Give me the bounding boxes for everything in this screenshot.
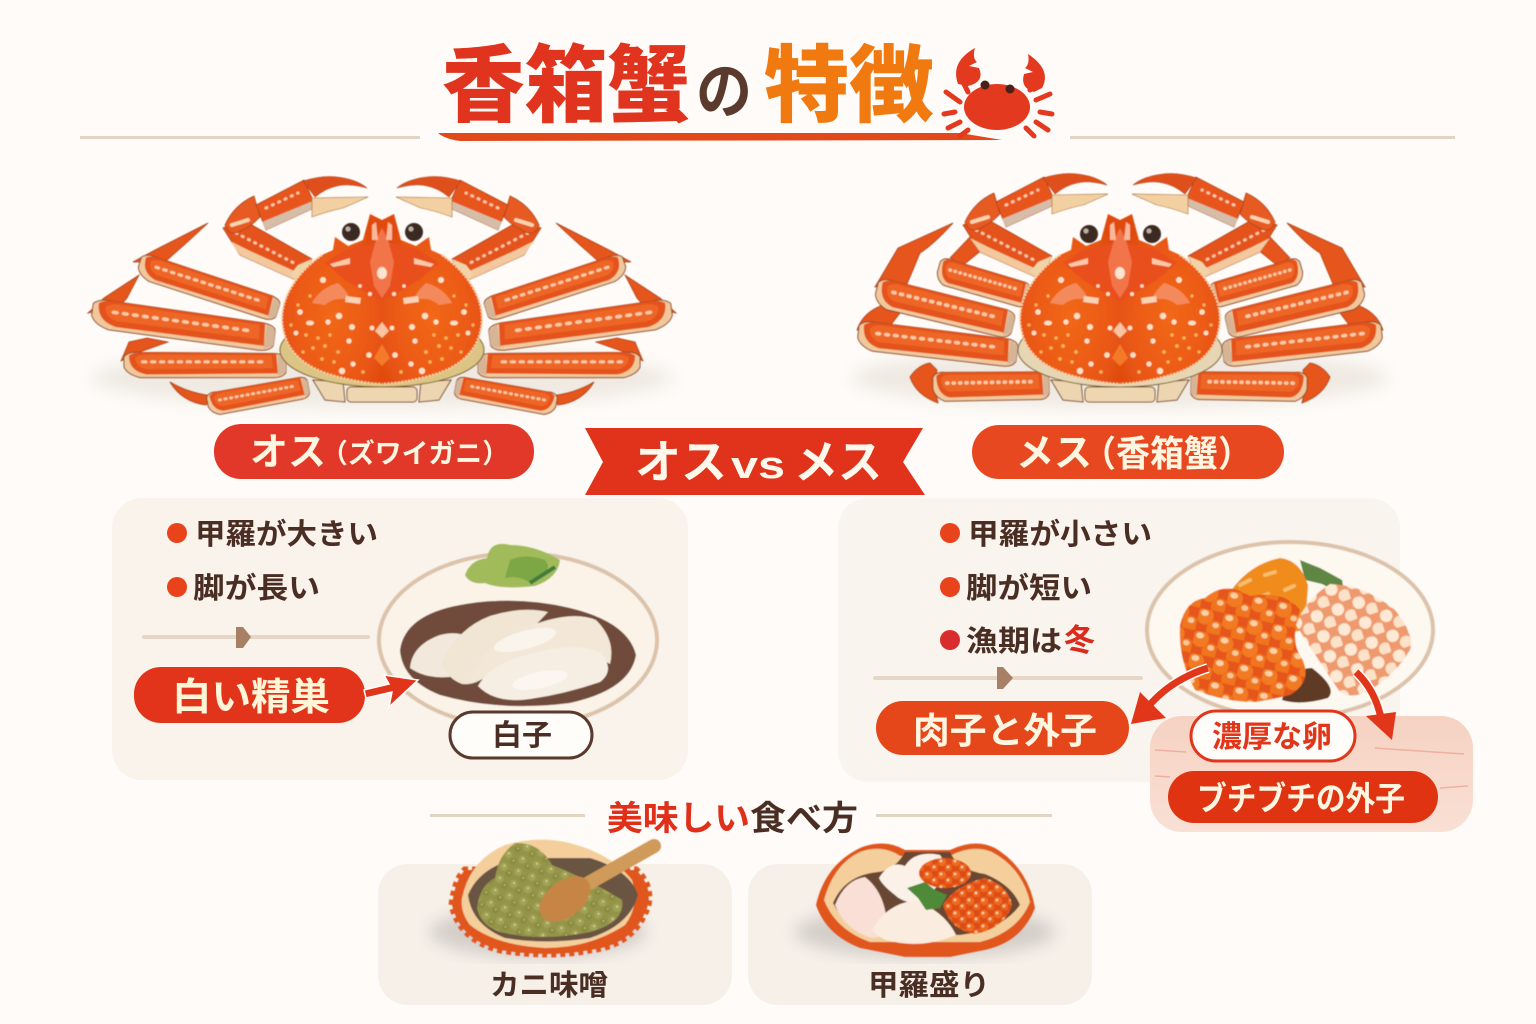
arrow: to outer roe label	[1356, 672, 1396, 740]
banner: male vs female: vs	[731, 445, 785, 487]
title text	[442, 19, 934, 140]
title text: の	[696, 41, 752, 131]
panel: female	[838, 498, 1473, 832]
card: crab miso	[378, 840, 732, 1005]
label: shirako: 白子	[492, 712, 552, 754]
label: meat roe and outer roe	[876, 701, 1129, 755]
bullet list: 甲羅が小さい	[968, 511, 1152, 553]
pink backdrop	[1150, 716, 1473, 832]
header rule left	[80, 136, 420, 139]
label: male: オス	[250, 421, 326, 476]
arrow: to meat roe label	[1131, 668, 1208, 724]
label: female: （香箱蟹）	[1082, 425, 1252, 477]
section heading: how to eat	[430, 791, 1052, 840]
bullet list: 冬	[1064, 615, 1095, 660]
bullet list: 漁期は	[966, 618, 1062, 660]
panel background	[838, 498, 1400, 782]
panel background	[112, 498, 688, 780]
dish: meat and roe in shell	[795, 843, 1055, 958]
label: female: メス	[1016, 422, 1092, 477]
title text: 香箱蟹	[442, 19, 690, 140]
title underline brush	[438, 133, 1002, 141]
card: shell serving	[748, 843, 1092, 1005]
bullet list: 脚が短い	[966, 565, 1092, 607]
icon: small crab	[944, 48, 1052, 136]
label: rich eggs: 濃厚な卵	[1212, 712, 1332, 756]
label: white sperm sac: 白い精巣	[172, 666, 330, 721]
label: rich eggs	[1191, 711, 1355, 761]
label: popping outer roe: ブチブチの外子	[1197, 772, 1405, 820]
dish: crab miso in shell	[430, 840, 654, 958]
plate: roe	[1147, 542, 1433, 718]
title	[438, 19, 1052, 141]
plate: shirako	[379, 544, 657, 727]
banner: male vs female: メス	[794, 426, 882, 492]
header rule right	[1070, 136, 1455, 139]
bullet list	[940, 511, 1152, 660]
label: male: （ズワイガニ）	[321, 432, 509, 471]
bullet list: 甲羅が大きい	[195, 511, 378, 553]
label: male	[214, 421, 534, 479]
card background	[748, 864, 1092, 1005]
male crab illustration	[88, 176, 676, 416]
title text: 特徴	[764, 19, 934, 140]
banner: male vs female: オス	[635, 426, 727, 492]
panel: male	[112, 498, 688, 780]
bullet list	[167, 511, 378, 607]
section heading: how to eat: 食べ方	[750, 791, 858, 840]
section heading: how to eat: 美味しい	[607, 791, 750, 840]
female crab illustration	[852, 174, 1388, 408]
label: white sperm sac	[134, 666, 365, 723]
divider arrow	[142, 627, 370, 648]
card background	[378, 864, 732, 1005]
label: 甲羅盛り	[868, 962, 990, 1004]
bullet list: 脚が長い	[193, 565, 320, 607]
arrow to plate	[364, 675, 418, 707]
divider arrow	[873, 667, 1143, 689]
label: female	[972, 422, 1284, 479]
label: カニ味噌	[490, 962, 608, 1004]
label: shirako	[450, 712, 592, 758]
banner: male vs female	[585, 426, 925, 495]
label: meat roe and outer roe: 肉子と外子	[913, 702, 1097, 754]
